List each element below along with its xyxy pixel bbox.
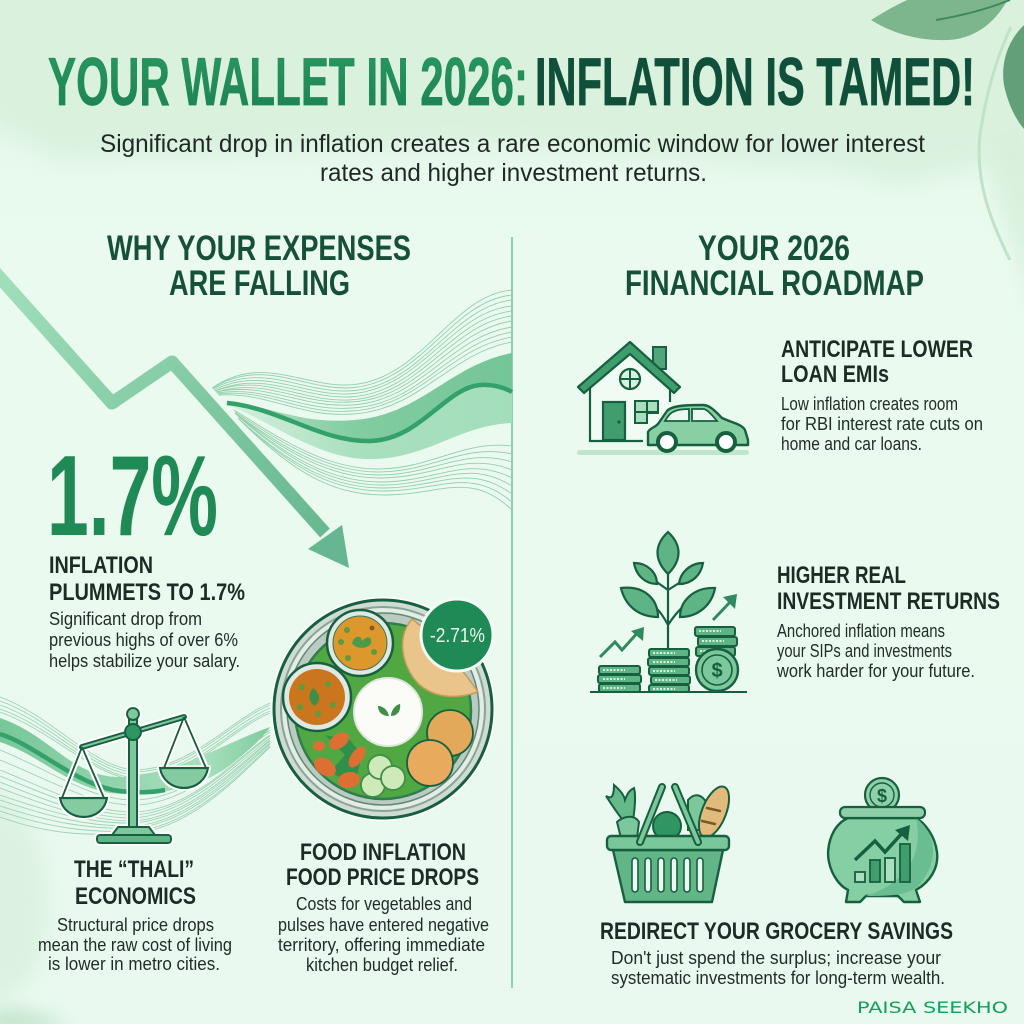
text block: thali economics: ECONOMICS: [75, 883, 196, 910]
text block: redirect your grocery savings: systematic investments for long-term wealth.: [611, 968, 945, 988]
text block: anticipate lower loan EMIs: for RBI interest rate cuts on: [781, 414, 983, 434]
text block: inflation plummets: helps stabilize your salary.: [49, 651, 240, 671]
heading: your 2026 financial roadmap: FINANCIAL ROADMAP: [625, 264, 924, 303]
text block: food inflation: Costs for vegetables and: [296, 894, 472, 914]
text block: redirect your grocery savings: Don't just spend the surplus; increase your: [611, 948, 941, 968]
text block: thali economics: mean the raw cost of living: [38, 935, 232, 955]
text block: thali economics: is lower in metro cities.: [48, 954, 220, 974]
heading: why your expenses are falling: WHY YOUR EXPENSES: [107, 229, 411, 268]
text block: food inflation: kitchen budget relief.: [306, 955, 458, 975]
text block: inflation plummets: Significant drop from: [49, 609, 202, 629]
text block: thali economics: Structural price drops: [57, 915, 214, 935]
brand: Paisa Seekho: PAISA SEEKHO: [857, 998, 1008, 1017]
wave ribbon: upper: [212, 290, 512, 510]
text block: higher real investment returns: [776, 562, 1000, 681]
text block: food inflation: [278, 839, 489, 975]
text block: redirect your grocery savings: [600, 918, 953, 988]
text block: higher real investment returns: HIGHER REAL: [777, 562, 906, 589]
text block: anticipate lower loan EMIs: ANTICIPATE LOWER: [781, 336, 973, 363]
icon: balance scale: [60, 708, 208, 843]
heading: why your expenses are falling: [107, 229, 411, 303]
icon: savings pot with coin: [828, 778, 937, 902]
cucumber slices: [361, 755, 405, 797]
rice mound: [354, 678, 422, 746]
text block: food inflation: FOOD INFLATION: [300, 839, 466, 866]
subtitle: Significant drop in inflation creates a rare economic window for lower interest: [100, 130, 925, 158]
title: YOUR WALLET IN 2026:: [48, 44, 528, 120]
bowl of curry: [283, 663, 351, 731]
icon: plant growing from coins: $: [711, 660, 723, 682]
heading: why your expenses are falling: ARE FALLING: [169, 264, 350, 303]
text block: inflation plummets: previous highs of over 6%: [49, 630, 238, 650]
icon: grocery basket: [606, 782, 735, 902]
wave ribbon: lower left: [0, 697, 270, 834]
vegetables: [311, 729, 369, 790]
text block: anticipate lower loan EMIs: Low inflation creates room: [781, 394, 958, 414]
text block: food inflation: FOOD PRICE DROPS: [286, 864, 479, 891]
icon: house and car: [577, 342, 749, 455]
decoration: top-right leaves: [871, 0, 1024, 260]
puris: [407, 710, 473, 786]
text block: higher real investment returns: your SIPs and investments: [777, 641, 952, 661]
text block: food inflation: territory, offering immediate: [278, 935, 485, 955]
heading: your 2026 financial roadmap: [625, 229, 924, 303]
subtitle: [100, 130, 925, 187]
icon: savings pot with coin: $: [877, 786, 887, 806]
text block: anticipate lower loan EMIs: LOAN EMIs: [781, 361, 889, 388]
column divider: [511, 237, 513, 988]
arrow: falling inflation line: [0, 271, 349, 568]
heading: your 2026 financial roadmap: YOUR 2026: [698, 229, 850, 268]
text block: anticipate lower loan EMIs: [781, 336, 983, 454]
text block: food inflation: pulses have entered negative: [278, 915, 489, 935]
icon: plant growing from coins: [590, 532, 747, 692]
subtitle: rates and higher investment returns.: [320, 159, 707, 187]
text block: inflation plummets: PLUMMETS TO 1.7%: [49, 579, 245, 606]
text block: thali economics: [38, 856, 232, 974]
text block: higher real investment returns: work harder for your future.: [776, 661, 975, 681]
stat: 1.7%: 1.7%: [47, 433, 218, 560]
badge: -2.71%: -2.71%: [430, 625, 485, 647]
text block: anticipate lower loan EMIs: home and car loans.: [781, 434, 922, 454]
icon: thali plate: [271, 597, 495, 821]
text block: higher real investment returns: Anchored inflation means: [777, 621, 945, 641]
text block: inflation plummets: [49, 552, 245, 671]
bowl of dal: [327, 610, 393, 676]
badge: -2.71%: [421, 599, 493, 671]
text block: inflation plummets: INFLATION: [49, 552, 153, 579]
roti: [403, 619, 478, 696]
text block: thali economics: THE “THALI”: [74, 856, 194, 883]
